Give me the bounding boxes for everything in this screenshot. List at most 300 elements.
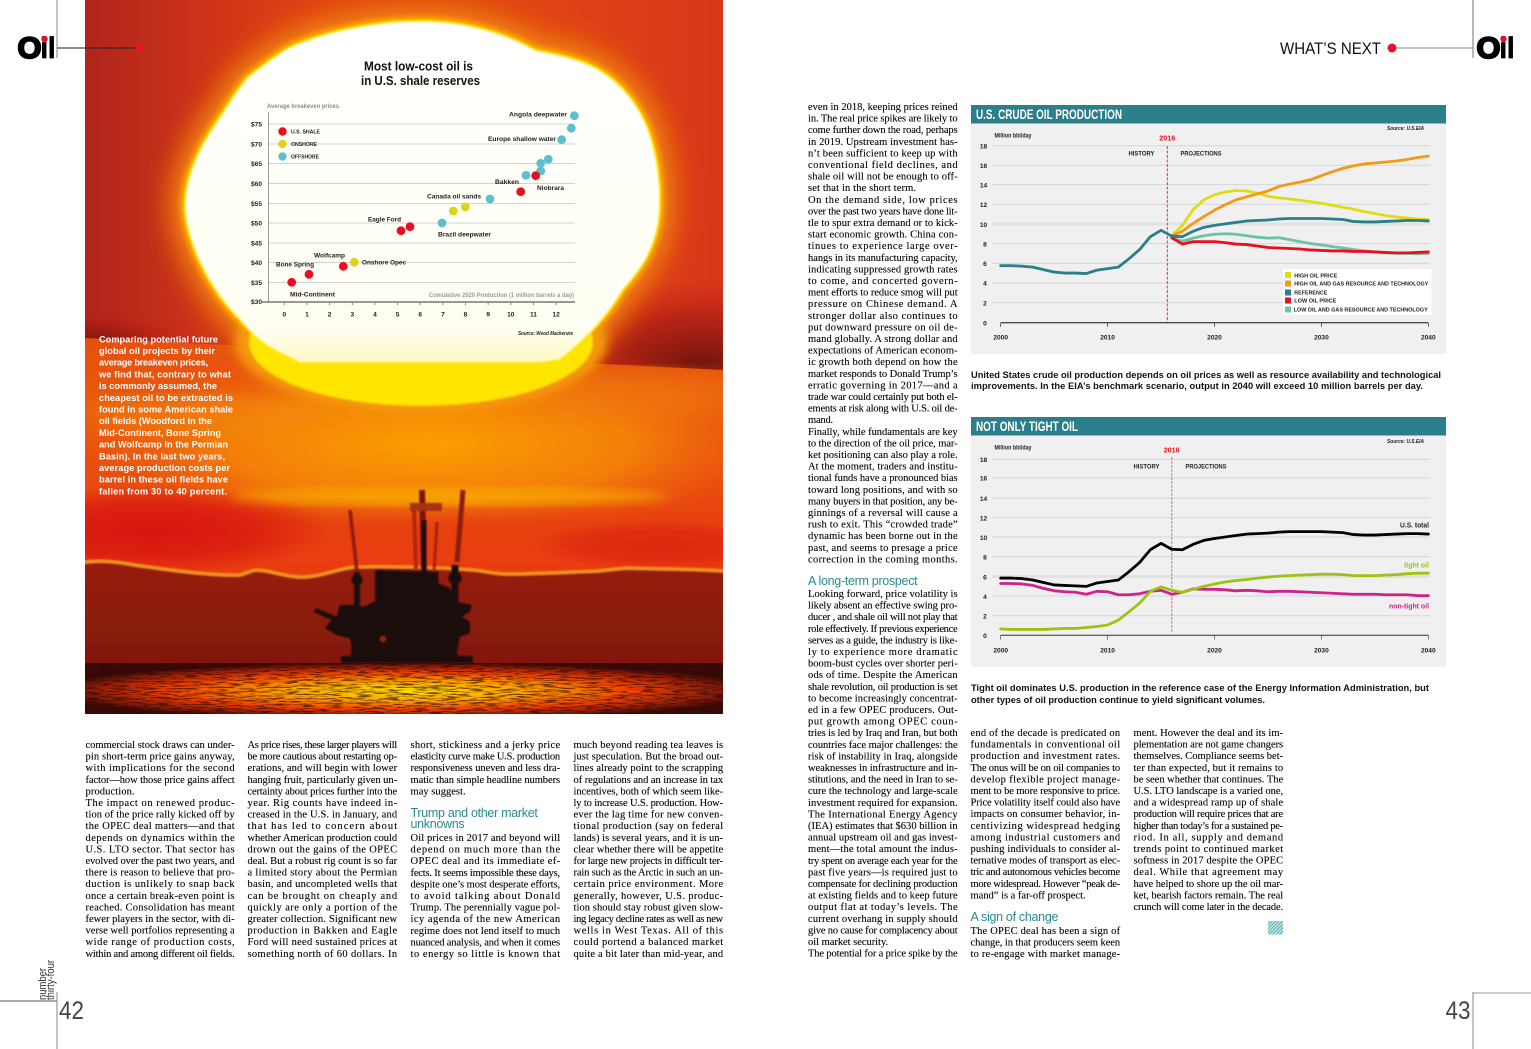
y axis labels: 8 xyxy=(983,554,987,561)
article column 4: ly to increase U.S. production. How- xyxy=(574,798,724,809)
x axis labels: 11 xyxy=(530,312,537,318)
photo sidebar text xyxy=(98,334,233,496)
data point labels: Bakken xyxy=(495,179,519,186)
article column 5: ods of time. Despite the American xyxy=(808,670,958,681)
units and source xyxy=(994,126,1424,140)
photo sidebar text: average production costs per xyxy=(99,463,230,473)
x axis title: Cumulative 2020 Production (1 million barrels a day) xyxy=(429,292,574,299)
article column 4: incentives, both of which seem like- xyxy=(574,786,724,797)
y axis labels: $55 xyxy=(251,201,262,208)
legend: REFERENCE xyxy=(1294,291,1328,297)
article column 7: ket, bearish factors remain. The real xyxy=(1134,890,1283,901)
article column 5: current overhang in supply should xyxy=(808,914,958,925)
line chart: production scenarios xyxy=(1001,156,1428,274)
x axis labels: 2030 xyxy=(1314,648,1329,654)
x axis labels: 0 xyxy=(282,312,286,318)
article column 7: crunch will come later in the decade. xyxy=(1134,902,1283,913)
legend xyxy=(1283,269,1432,315)
y axis labels: 16 xyxy=(980,476,987,482)
article column 5: At the moment, traders and institu- xyxy=(808,462,958,473)
article column 5: in. The real price spikes are likely to xyxy=(808,114,958,125)
2016 marker: PROJECTIONS xyxy=(1186,464,1227,470)
subheading: A long-term prospect: A long-term prospect xyxy=(808,574,918,588)
article column 6: change, in that producers seem keen xyxy=(970,938,1121,949)
dark red cloud band with bright edge xyxy=(85,558,723,663)
photo sidebar text: Mid-Continent, Bone Spring xyxy=(99,428,221,438)
y axis labels: 14 xyxy=(980,182,987,189)
chart title: Most low-cost oil is xyxy=(364,60,473,74)
legend: HIGH OIL AND GAS RESOURCE AND TECHNOLOGY xyxy=(1294,282,1429,288)
article column 3: matic than simple headline numbers xyxy=(410,775,560,786)
subheading: Trump and other market unknowns xyxy=(410,806,538,831)
article column 5: tional funds have a pronounced bias xyxy=(808,473,958,484)
article column 1: duction is unlikely to snap back xyxy=(86,879,235,890)
gridlines xyxy=(992,459,1430,616)
article column 3: elasticity curve make U.S. production xyxy=(410,752,561,763)
article column 7: ter than expected, but it remains to xyxy=(1134,763,1283,774)
y axis labels: 4 xyxy=(983,281,987,288)
data point labels: Europe shallow water xyxy=(488,136,556,143)
x axis labels: 9 xyxy=(486,312,490,318)
article column 3: short, stickiness and a jerky price xyxy=(410,740,560,751)
article column 6: among industrial customers and xyxy=(970,832,1121,843)
article column 7: softness in 2017 despite the OPEC xyxy=(1134,856,1283,867)
x axis labels: 2020 xyxy=(1207,648,1222,654)
article column 5: weaknesses in infrastructure and in- xyxy=(808,763,958,774)
article column 1: wide range of production costs, xyxy=(86,937,234,948)
article column 4: rain such as the Arctic in such an un- xyxy=(574,868,724,879)
article column 6: pushing individuals to consider al- xyxy=(970,844,1121,855)
article column 5: risk of instability in Iraq, alongside xyxy=(808,751,958,762)
2016 marker: HISTORY xyxy=(1128,150,1155,158)
article column 7: higher than today’s for a sustained pe- xyxy=(1134,821,1284,832)
legend: field types: U.S. SHALE xyxy=(291,130,320,136)
article column 5: countries face major challenges: the xyxy=(808,740,958,751)
article column 5: shale revolution, oil production is set xyxy=(808,682,958,693)
data points: U.S. shale xyxy=(287,171,540,287)
y axis labels: $50 xyxy=(251,220,262,228)
article column 7: ment. However the deal and its im- xyxy=(1134,728,1284,739)
article column 2: be more cautious about restarting op- xyxy=(248,752,398,763)
article column 3: icy agenda of the new American xyxy=(410,914,561,925)
article column 7: themselves. Compliance seems bet- xyxy=(1134,751,1284,762)
right page header: section title and logo: il xyxy=(1500,32,1514,65)
article column 2: deal. But a robust rig count is so far xyxy=(248,856,398,867)
left page header: logo and rule xyxy=(18,0,144,65)
photo sidebar text: cheapest oil to be extracted is xyxy=(99,393,233,403)
line labels xyxy=(1389,522,1429,610)
article column 5: ment—the total amount the indus- xyxy=(808,844,958,855)
left page folio xyxy=(0,960,84,1049)
article column 4: ing legacy decline rates as well as new xyxy=(574,914,724,925)
x axis labels: 2030 xyxy=(1314,334,1329,342)
article column 6: more widespread. However “peak de- xyxy=(970,879,1121,890)
chart panel: U.S. crude oil production xyxy=(971,105,1446,354)
right page header: section title and logo: O xyxy=(1476,32,1500,65)
data point labels: Mid-Continent xyxy=(290,292,336,298)
y axis title: Average breakeven prices xyxy=(267,104,340,110)
article column 5: shale oil will not be enough to off- xyxy=(808,172,958,183)
article column 7: plementation are not game changers xyxy=(1134,740,1283,751)
article column 5: come further down the road, perhaps xyxy=(808,125,958,136)
end-of-article mark xyxy=(1268,921,1283,934)
article column 6: centivizing widespread hedging xyxy=(970,821,1121,832)
article column 4: clear whether there will be appetite xyxy=(574,844,723,855)
article column 5: correction in the coming months. xyxy=(808,554,958,565)
subheading: Trump and other market unknowns: Trump and other market xyxy=(410,806,538,820)
article column 5: ly to experience more dramatic xyxy=(808,647,958,658)
caption: U.S. crude oil production: improvements. In the EIA’s benchmark scenario, output in 2040 will exceed 10 million barrels per day. xyxy=(971,381,1423,391)
legend: LOW OIL AND GAS RESOURCE AND TECHNOLOGY xyxy=(1294,308,1428,314)
caption: U.S. crude oil production xyxy=(971,370,1441,391)
y axis labels: $70 xyxy=(251,142,262,148)
article column 3: Trump. The perennially vague pol- xyxy=(410,903,561,914)
2016 marker: PROJECTIONS xyxy=(1180,150,1222,158)
article column 5: in 2019. Upstream investment has- xyxy=(808,137,958,148)
x axis labels: 2040 xyxy=(1421,334,1436,342)
y axis labels: $35 xyxy=(251,280,262,287)
article column 2 xyxy=(248,740,398,960)
y axis labels: 2 xyxy=(983,300,987,307)
article column 5: The potential for a price spike by the xyxy=(808,949,958,960)
units and source: Source: U.S.EIA xyxy=(1387,126,1424,132)
article column 3: OPEC deal and its immediate ef- xyxy=(410,856,561,867)
article column 6: ment to be more responsive to price. xyxy=(970,786,1120,797)
units and source: Million bbl/day xyxy=(994,446,1032,452)
article column 4: for large new projects in difficult ter- xyxy=(574,856,724,867)
article column 2: erations, and will begin with lower xyxy=(248,763,398,774)
x axis labels: 2000 xyxy=(993,334,1008,342)
article column 5: mand globally. A strong dollar and xyxy=(808,334,958,345)
caption: not only tight oil: Tight oil dominates U.S. production in the reference case of the Energy Information Administration, but xyxy=(971,683,1429,693)
article column 5: serves as a guide, the industry is like- xyxy=(808,635,958,646)
article column 4: tion should stay robust given slow- xyxy=(574,902,724,913)
article column 6: Price volatility itself could also have xyxy=(970,798,1120,809)
article column 2: something north of 60 dollars. In xyxy=(248,949,398,960)
photo sidebar text: barrel in these oil fields have xyxy=(99,475,228,485)
right page folio: 43 xyxy=(1446,997,1470,1025)
article column 3: nuanced analysis, and when it comes xyxy=(410,937,560,948)
2016 marker xyxy=(1128,134,1222,322)
article column 1: tion of the price rally kicked off by xyxy=(86,810,235,821)
article column 7: deal. While that agreement may xyxy=(1134,867,1284,878)
y axis labels: 0 xyxy=(983,633,987,640)
y axis labels: $45 xyxy=(251,240,262,248)
article column 4: much beyond reading tea leaves is xyxy=(574,740,723,751)
units and source: Million bbl/day xyxy=(994,134,1032,140)
article column 2: As price rises, these larger players will xyxy=(248,740,397,751)
y axis labels: 0 xyxy=(983,320,987,327)
article column 2: year. Rig counts have indeed in- xyxy=(248,798,398,809)
article column 5: On the demand side, low prices xyxy=(808,195,958,206)
right page folio xyxy=(1446,992,1531,1049)
x axis labels xyxy=(993,648,1436,654)
article column 2: greater collection. Significant new xyxy=(248,914,398,925)
article column 5: investment required for expansion. xyxy=(808,798,958,809)
x axis labels: 2040 xyxy=(1421,648,1436,654)
article column 5: conventional field declines, and xyxy=(808,160,958,171)
x axis labels: 2020 xyxy=(1207,334,1222,342)
photo sidebar text: we find that, contrary to what xyxy=(98,369,231,379)
2016 marker xyxy=(1134,446,1227,632)
photo sidebar text: Basin). In the last two years, xyxy=(99,451,225,461)
y axis labels: 6 xyxy=(983,261,987,268)
article column 7: and a widespread ramp up of shale xyxy=(1134,798,1283,809)
caption: not only tight oil: other types of oil production continue to yield significant volumes. xyxy=(971,695,1265,705)
article column 2: a limited story about the Permian xyxy=(248,868,398,879)
article column 2: basin, and uncompleted wells that xyxy=(248,879,397,890)
sea xyxy=(85,663,723,714)
left page header: logo and rule: il xyxy=(40,32,56,65)
y axis labels: 14 xyxy=(980,496,987,503)
x axis labels: 2 xyxy=(328,312,332,318)
article column 5: compensate for declining production xyxy=(808,879,958,890)
x axis labels: 6 xyxy=(418,312,422,318)
sun glow xyxy=(185,21,660,363)
article column 6: production and investment rates. xyxy=(970,751,1120,762)
y axis labels: $65 xyxy=(251,161,262,168)
article column 5: ginnings of a reversal will cause a xyxy=(808,508,958,519)
article column 1: depends on dynamics within the xyxy=(86,833,235,844)
article column 5: even in 2018, keeping prices reined xyxy=(808,102,958,113)
y axis labels: $30 xyxy=(251,299,262,306)
line labels: tight oil xyxy=(1404,562,1429,570)
article column 2: quickly are only a portion of the xyxy=(248,902,397,913)
article column 4: of regulations and an increase in tax xyxy=(574,775,724,786)
y axis labels: 8 xyxy=(983,241,987,248)
article column 1: with implications for the second xyxy=(86,763,235,774)
article column 2: drown out the gains of the OPEC xyxy=(248,844,397,855)
article column 6: ternative modes of transport as elec- xyxy=(970,856,1121,867)
article column 6: to re-engage with market manage- xyxy=(970,949,1121,960)
article column 5: mand. xyxy=(808,415,833,426)
article column 5: toward long positions, and with so xyxy=(808,485,958,496)
axis xyxy=(1001,635,1428,640)
header bar xyxy=(971,105,1446,124)
photo sidebar text: average breakeven prices, xyxy=(99,358,208,368)
article column 1: The impact on renewed produc- xyxy=(86,798,235,809)
left page folio: number xyxy=(37,968,49,1000)
article column 5: (IEA) estimates that $630 billion in xyxy=(808,821,958,832)
data points: offshore xyxy=(438,111,579,227)
article column 1: within and among different oil fields. xyxy=(86,949,234,960)
article column 5: past five years—is required just to xyxy=(808,867,958,878)
y axis labels: 18 xyxy=(980,457,987,464)
x axis labels: 12 xyxy=(552,312,560,318)
article column 5: stitutions, and the need in Iran to se- xyxy=(808,775,958,786)
2016 marker: 2016 xyxy=(1159,134,1175,142)
article column 1 xyxy=(86,740,235,960)
article column 7: trends point to continued market xyxy=(1134,844,1283,855)
legend: HIGH OIL PRICE xyxy=(1294,273,1338,279)
article column 7: be seen whether that continues. The xyxy=(1134,774,1283,785)
data point labels: Bone Spring xyxy=(276,262,314,268)
article column 5: ducer , and shale oil will not play that xyxy=(808,612,958,623)
article column 6: tric and autonomous vehicles become xyxy=(970,867,1120,878)
article column 5: hangs in its manufacturing capacity, xyxy=(808,253,958,264)
article column 5: n’t been sufficient to keep up with xyxy=(808,148,958,159)
article column 6: The onus will be on oil companies to xyxy=(970,763,1120,774)
article column 5: ed in a few OPEC producers. Out- xyxy=(808,705,958,716)
x axis labels: 4 xyxy=(373,312,377,318)
article column 2: Ford will need sustained prices at xyxy=(248,937,397,948)
data point labels: Wolfcamp xyxy=(314,252,345,260)
x axis labels: 3 xyxy=(350,312,354,318)
chart title: in U.S. shale reserves xyxy=(361,74,480,88)
article column 3: may suggest. xyxy=(410,786,466,797)
left page folio: 42 xyxy=(59,997,84,1025)
article column 1: commercial stock draws can under- xyxy=(86,740,235,751)
article column 3: to avoid talking about Donald xyxy=(410,891,561,902)
article column 5: boom-bust cycles over shorter peri- xyxy=(808,659,958,670)
article column 1: reached. Consolidation has meant xyxy=(86,902,235,913)
y axis labels xyxy=(980,143,987,327)
article column 5: dynamic has been borne out in the xyxy=(808,531,958,542)
data point labels: Brazil deepwater xyxy=(438,232,491,238)
article column 5: ic growth both depend on how the xyxy=(808,357,958,368)
article column 4 xyxy=(572,740,724,960)
data points: onshore xyxy=(350,203,470,267)
article column 1: verse well portfolios representing a xyxy=(86,926,235,937)
article column 5: over the past two years have done lit- xyxy=(808,206,958,217)
x axis labels xyxy=(282,312,560,318)
y axis labels: 6 xyxy=(983,574,987,581)
2016 marker: 2016 xyxy=(1164,446,1180,454)
article column 5: trade war could certainly put both el- xyxy=(808,392,958,403)
data point labels xyxy=(276,112,567,298)
x axis labels: 8 xyxy=(464,312,468,318)
photo sidebar text: is commonly assumed, the xyxy=(99,381,217,391)
yellow sun reflection xyxy=(230,325,613,412)
y axis labels: 4 xyxy=(983,594,987,601)
article column 4: ever the lag time for new conven- xyxy=(574,810,724,821)
photo: offshore rig at sunset with sun xyxy=(85,0,723,714)
article column 7: U.S. LTO landscape is a varied one, xyxy=(1134,786,1283,797)
article column 5: put downward pressure on oil de- xyxy=(808,322,958,333)
sky above horizon xyxy=(85,0,723,370)
article column 4: generally, however, U.S. produc- xyxy=(574,891,724,902)
article column 5: tle to spur extra demand or to kick- xyxy=(808,218,958,229)
right page header: section title and logo xyxy=(1280,0,1514,65)
line labels: U.S. total xyxy=(1400,522,1429,530)
x axis labels: 1 xyxy=(305,312,309,318)
article column 5: Looking forward, price volatility is xyxy=(808,589,958,600)
article column 5: ment efforts to reduce smog will put xyxy=(808,288,958,299)
y axis labels: $60 xyxy=(251,181,262,188)
article column 4: certain price environment. More xyxy=(574,879,723,890)
article column 2: whether American production could xyxy=(248,833,398,844)
sun disc xyxy=(185,21,660,363)
2016 marker: HISTORY xyxy=(1134,464,1160,470)
article column 7: production will require prices that are xyxy=(1134,809,1283,820)
photo sidebar text: Comparing potential future xyxy=(99,334,218,344)
data point labels: Onshore Opec xyxy=(362,260,406,266)
article column 5: pressure on Chinese demand. A xyxy=(808,299,958,310)
article column 2: creased in the U.S. in January, and xyxy=(248,810,398,821)
y axis labels: 18 xyxy=(980,143,987,150)
data point labels: Angola deepwater xyxy=(509,112,567,118)
y axis labels: 12 xyxy=(980,515,987,522)
data point labels: Niobrara xyxy=(537,185,564,192)
left page folio: thirty-four xyxy=(45,960,57,1000)
article column 3 xyxy=(410,740,561,960)
article column 2: hanging fruit, particularly given un- xyxy=(248,775,398,786)
article column 1: pin short-term price gains anyway, xyxy=(86,752,234,763)
article column 6: mand” is a far-off prospect. xyxy=(970,890,1086,901)
article column 5: output flat at today’s levels. The xyxy=(808,902,958,913)
article column 5: tinues to experience large over- xyxy=(808,241,958,252)
article column 5: at existing fields and to keep future xyxy=(808,891,958,902)
data point labels: Eagle Ford xyxy=(368,216,401,224)
article column 1: production. xyxy=(86,786,134,797)
header bar: NOT ONLY TIGHT OIL xyxy=(976,418,1078,434)
article column 6: impacts on consumer behavior, in- xyxy=(970,809,1121,820)
article column 6: fundamentals in conventional oil xyxy=(970,740,1120,751)
x axis labels: 2010 xyxy=(1100,648,1115,654)
article column 5: erratic governing in 2017—and a xyxy=(808,380,958,391)
article column 5: to become increasingly concentrat- xyxy=(808,693,958,704)
article column 7: riod. In all, supply and demand xyxy=(1134,832,1284,843)
article column 7 xyxy=(1134,728,1284,913)
article column 5: expectations of American econom- xyxy=(808,346,958,357)
axis xyxy=(1001,323,1428,327)
photo sidebar text: oil fields (Woodford in the xyxy=(99,416,212,426)
article column 5: oil market security. xyxy=(808,937,888,948)
photo sidebar text: and Wolfcamp in the Permian xyxy=(99,440,228,450)
legend: LOW OIL PRICE xyxy=(1294,299,1337,305)
article column 3: despite one’s most desperate efforts, xyxy=(410,879,560,890)
data point labels: Canada oil sands xyxy=(427,194,481,200)
gridlines xyxy=(992,146,1430,303)
right page header: section title and logo: WHAT’S NEXT xyxy=(1280,39,1381,58)
article column 5: annual upstream oil and gas invest- xyxy=(808,833,958,844)
article column 3: depend on much more than the xyxy=(410,845,560,856)
article column 5: ements at risk along with U.S. oil de- xyxy=(808,404,958,415)
article column 6: end of the decade is predicated on xyxy=(970,728,1121,739)
article column 1: once a certain break-even point is xyxy=(86,891,235,902)
article column 1: evolved over the past two years, and xyxy=(86,856,235,867)
article column 5: set that in the short term. xyxy=(808,183,916,194)
article column 2: production in Bakken and Eagle xyxy=(248,926,397,937)
article column 4: lands) is several years, and it is un- xyxy=(574,833,724,844)
article column 3: responsiveness uneven and less dra- xyxy=(410,763,561,774)
article column 5: stronger dollar also continues to xyxy=(808,311,958,322)
chart title xyxy=(361,60,480,88)
x axis labels: 2010 xyxy=(1100,334,1115,342)
article column 1: there is reason to believe that pro- xyxy=(86,868,235,879)
chart panel: not only tight oil xyxy=(971,417,1446,667)
article column 3: regime does not lend itself to much xyxy=(410,926,561,937)
article column 4: lines already point to the scrapping xyxy=(574,763,724,774)
header bar xyxy=(971,417,1446,436)
article column 5 xyxy=(808,102,958,960)
article column 5: market responds to Donald Trump’s xyxy=(808,369,958,380)
article column 2: that has led to concern about xyxy=(248,821,397,832)
article column 7: have helped to shore up the oil mar- xyxy=(1134,879,1284,890)
x axis labels: 5 xyxy=(396,312,400,318)
article column 6: develop flexible project manage- xyxy=(970,774,1121,785)
oil rig silhouette xyxy=(313,490,473,663)
line labels: non-tight oil xyxy=(1389,604,1429,610)
article column 5: likely absent an effective swing pro- xyxy=(808,601,958,612)
article column 3: to energy so little is known that xyxy=(410,949,560,960)
article column 1: fewer players in the sector, with di- xyxy=(86,914,235,925)
article column 3: Oil prices in 2017 and beyond will xyxy=(410,833,560,844)
source: Source: Wood Mackenzie xyxy=(518,331,573,337)
article column 5: many buyers in that position, any be- xyxy=(808,496,958,507)
article column 5: The International Energy Agency xyxy=(808,809,958,820)
x axis labels: 7 xyxy=(441,312,445,318)
